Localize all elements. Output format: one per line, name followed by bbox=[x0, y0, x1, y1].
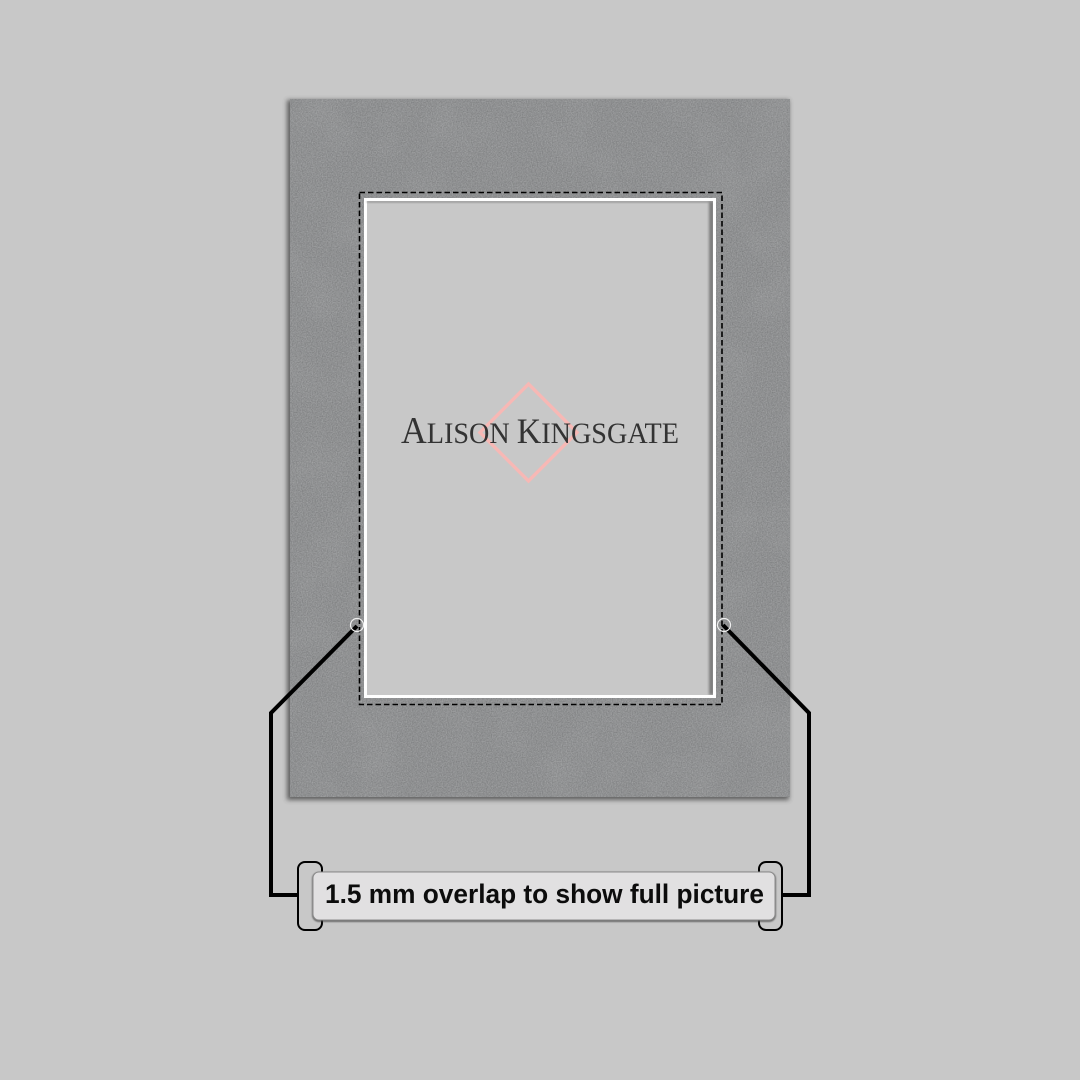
icon: right marker circle bbox=[718, 618, 730, 632]
icon: left marker circle bbox=[350, 618, 364, 632]
brand name: ALISON KINGSGATE bbox=[401, 410, 679, 452]
icon: pink diamond bbox=[480, 384, 577, 481]
logo: Alison Kingsgate bbox=[401, 384, 679, 481]
callout: right leader line bbox=[718, 618, 809, 895]
panel: grey mount board bbox=[287, 99, 790, 800]
picture opening with bevel bbox=[364, 198, 716, 698]
label: overlap caption bbox=[298, 862, 782, 930]
caption text: 1.5 mm overlap to show full picture bbox=[325, 879, 764, 909]
dashed overlap line bbox=[360, 192, 722, 704]
callout: left leader line bbox=[271, 618, 364, 895]
